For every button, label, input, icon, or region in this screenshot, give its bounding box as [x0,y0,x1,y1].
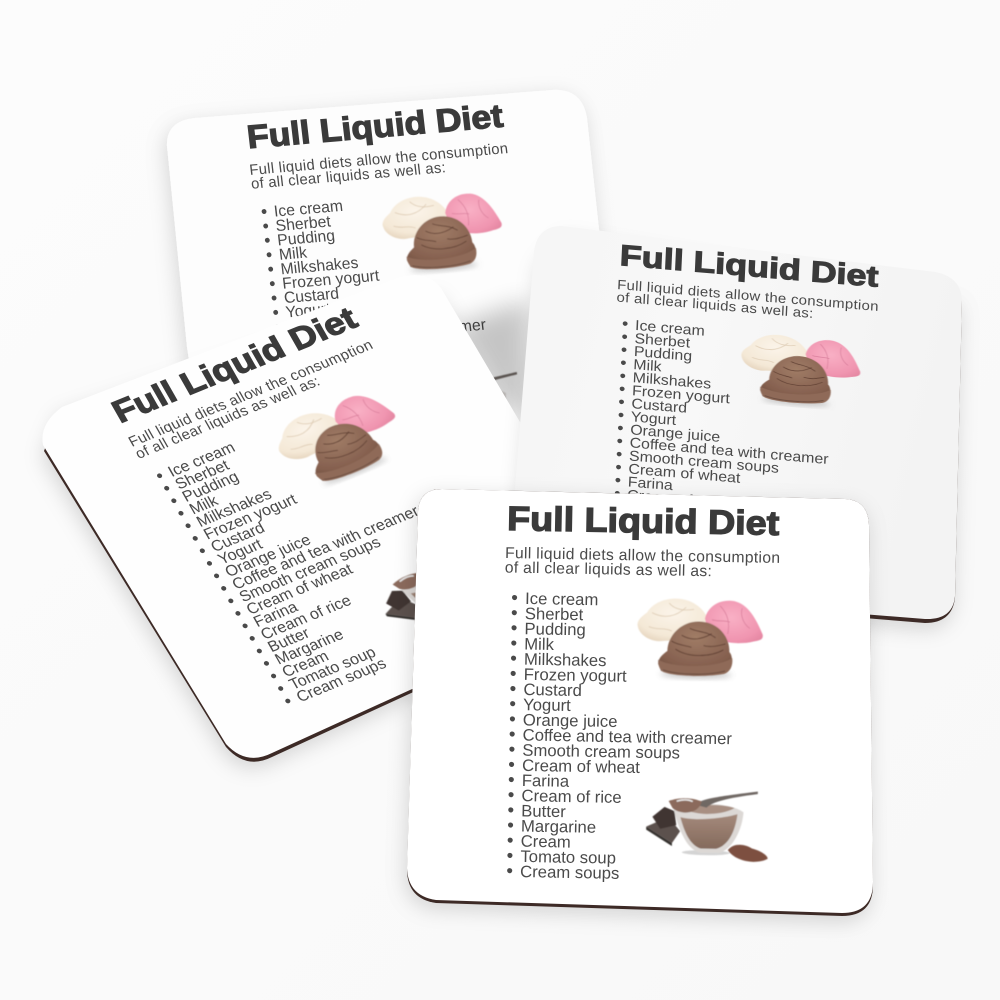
food list: • [507,815,514,836]
food list: Cream of wheat [628,461,742,487]
food list: • [507,830,514,852]
food list: • [508,785,515,806]
food list: • [266,259,275,279]
food list: • [619,366,626,385]
title: Full Liquid Diet [619,239,879,293]
icon: ice cream scoops [380,190,506,275]
food list: • [510,633,517,654]
food list: Yogurt [631,409,677,429]
cast shadow from upper coasters [455,300,528,418]
food list: Cream of rice [258,592,355,643]
food list: Milkshakes [632,370,712,393]
food list: Tomato soup [520,847,616,868]
food list: • [510,648,517,670]
food list: • [617,418,624,437]
food list: • [260,201,268,222]
food list: • [619,379,626,398]
food list: • [511,603,518,624]
food list: • [259,653,274,673]
food list: Butter [265,625,313,656]
food list: • [616,444,623,464]
food list: • [617,405,625,424]
icon: chocolate pudding [368,539,508,641]
coaster: back top [167,90,625,500]
food list: Cream soups [294,655,389,706]
food list: • [159,478,175,498]
food list: • [223,591,239,611]
food list: Milkshakes [194,486,275,531]
food list: Pudding [180,469,242,506]
food list: • [265,244,273,265]
food list [260,184,488,351]
food list: Smooth cream soups [629,448,780,477]
food list: • [273,317,282,337]
food list: Pudding [524,619,586,639]
food list: Orange juice [222,532,314,581]
food list: • [216,578,232,598]
food list: Cream soups [520,862,620,883]
food list: • [511,618,518,639]
food list: • [263,230,272,251]
food list: • [273,679,289,698]
coaster content [607,238,881,524]
food list: • [511,588,518,609]
food list: Custard [208,520,268,556]
coaster content [244,97,541,459]
food list: Ice cream [273,198,344,221]
food list: • [621,327,628,346]
food list: Pudding [634,344,692,365]
food list: • [230,604,246,623]
intro text: Full liquid diets allow the consumption [505,545,780,567]
food list: • [261,216,270,236]
food list: Pudding [276,228,336,249]
food list: • [508,770,515,791]
intro text [505,545,780,581]
food list: • [616,431,623,450]
food list: Coffee and tea with creamer [522,725,733,748]
intro text: of all clear liquids as well as: [250,160,447,193]
food list: Cream of wheat [244,561,356,618]
coaster: left tilted [42,275,620,762]
food list: Coffee and tea with creamer [288,317,488,350]
food list: Smooth cream soups [522,741,680,763]
food list: Frozen yogurt [201,491,301,543]
coaster edge [407,489,873,916]
food list: Yogurt [215,536,266,568]
icon: chocolate pudding [412,371,535,448]
food list: Yogurt [523,695,571,715]
coaster: front [407,489,873,916]
food list: Margarine [272,626,347,668]
food list: Farina [522,771,570,791]
food list: • [620,353,627,372]
food list: Ice cream [165,439,238,481]
food list: • [187,528,203,548]
food list: Cream of rice [521,786,622,807]
food list: Milk [633,357,662,375]
food list: Margarine [521,816,596,837]
food list: Ice cream [635,318,705,340]
icon: chocolate pudding [646,790,769,862]
icon: ice cream scoops [637,598,763,680]
intro text: Full liquid diets allow the consumption [126,338,376,450]
food list: • [506,846,513,867]
food list: Milkshakes [524,650,607,670]
food list: Sherbet [275,213,332,235]
intro text: Full liquid diets allow the consumption [617,278,879,315]
intro text: Full liquid diets allow the consumption [249,141,509,179]
food list: Frozen yogurt [281,267,381,293]
food list: • [166,491,182,511]
food list: • [173,503,189,523]
food list: • [614,483,621,503]
food list: • [209,566,224,586]
food list: Custard [283,285,340,307]
food list: • [510,664,517,685]
food list: • [614,470,622,490]
food list: Smooth cream soups [237,534,384,606]
food list: • [280,691,296,711]
food list: Farina [251,599,301,631]
food list: • [268,273,277,294]
food list: Orange juice [630,422,721,446]
coaster edge [44,290,620,762]
food list: Ice cream [525,589,599,609]
food list: Milk [187,493,221,518]
food list: Custard [631,396,687,417]
coaster body [500,226,962,619]
food list: • [509,709,516,730]
food list: • [509,694,516,715]
food list: • [270,288,278,308]
food list: • [506,861,513,882]
food list [614,314,834,520]
food list: • [237,616,253,636]
food list: • [266,666,282,686]
icon: ice cream scoops [267,385,415,495]
food list: Frozen yogurt [632,383,731,407]
food list: Milk [278,244,308,264]
coaster body [42,275,620,758]
food list: Coffee and tea with creamer [629,435,829,468]
food list: Yogurt [285,301,332,322]
food list [506,588,735,886]
food list: Sherbet [525,604,584,624]
coaster body [167,90,625,500]
intro text: of all clear liquids as well as: [616,290,814,322]
food list: • [508,755,515,776]
food list: • [252,641,267,661]
food list: Cream of wheat [522,756,640,777]
intro text: of all clear liquids as well as: [505,560,712,580]
icon: ice cream scoops [739,332,862,410]
food list: Cream [521,832,571,852]
title: Full Liquid Diet [507,500,780,543]
food list: • [615,457,622,477]
food list: Cream of rice [627,487,723,511]
coaster content [104,300,526,713]
food list: Butter [521,801,566,821]
food list: • [622,314,629,333]
food list: Sherbet [634,331,691,351]
food list: • [152,466,167,486]
title: Full Liquid Diet [106,300,363,429]
food list: • [194,541,210,561]
food list: Farina [627,474,674,494]
food list: • [507,800,514,821]
food list: • [271,302,280,323]
food list: • [244,628,260,648]
food list: Orange juice [286,311,378,336]
coaster body [407,489,873,913]
coaster content [499,500,781,887]
food list: Sherbet [172,457,233,493]
food list: Custard [523,680,582,700]
food list: Milk [524,634,555,654]
food list: • [202,553,217,573]
food list: Frozen yogurt [524,665,627,686]
food list: • [618,392,625,411]
food list: • [509,724,516,745]
food list: • [508,739,515,761]
coaster: back right [500,226,962,623]
food list: Tomato soup [287,644,379,693]
title: Full Liquid Diet [245,97,505,155]
food list: • [275,331,283,351]
coaster edge [520,232,962,623]
food list: Cream [279,648,332,681]
food list [152,388,487,711]
food list: Milkshakes [280,255,359,278]
food list: • [180,516,196,536]
intro text: of all clear liquids as well as: [133,374,323,462]
food list: • [509,679,516,700]
food list: • [620,340,628,359]
food list: Orange juice [523,710,618,731]
food list: Coffee and tea with creamer [229,503,423,593]
